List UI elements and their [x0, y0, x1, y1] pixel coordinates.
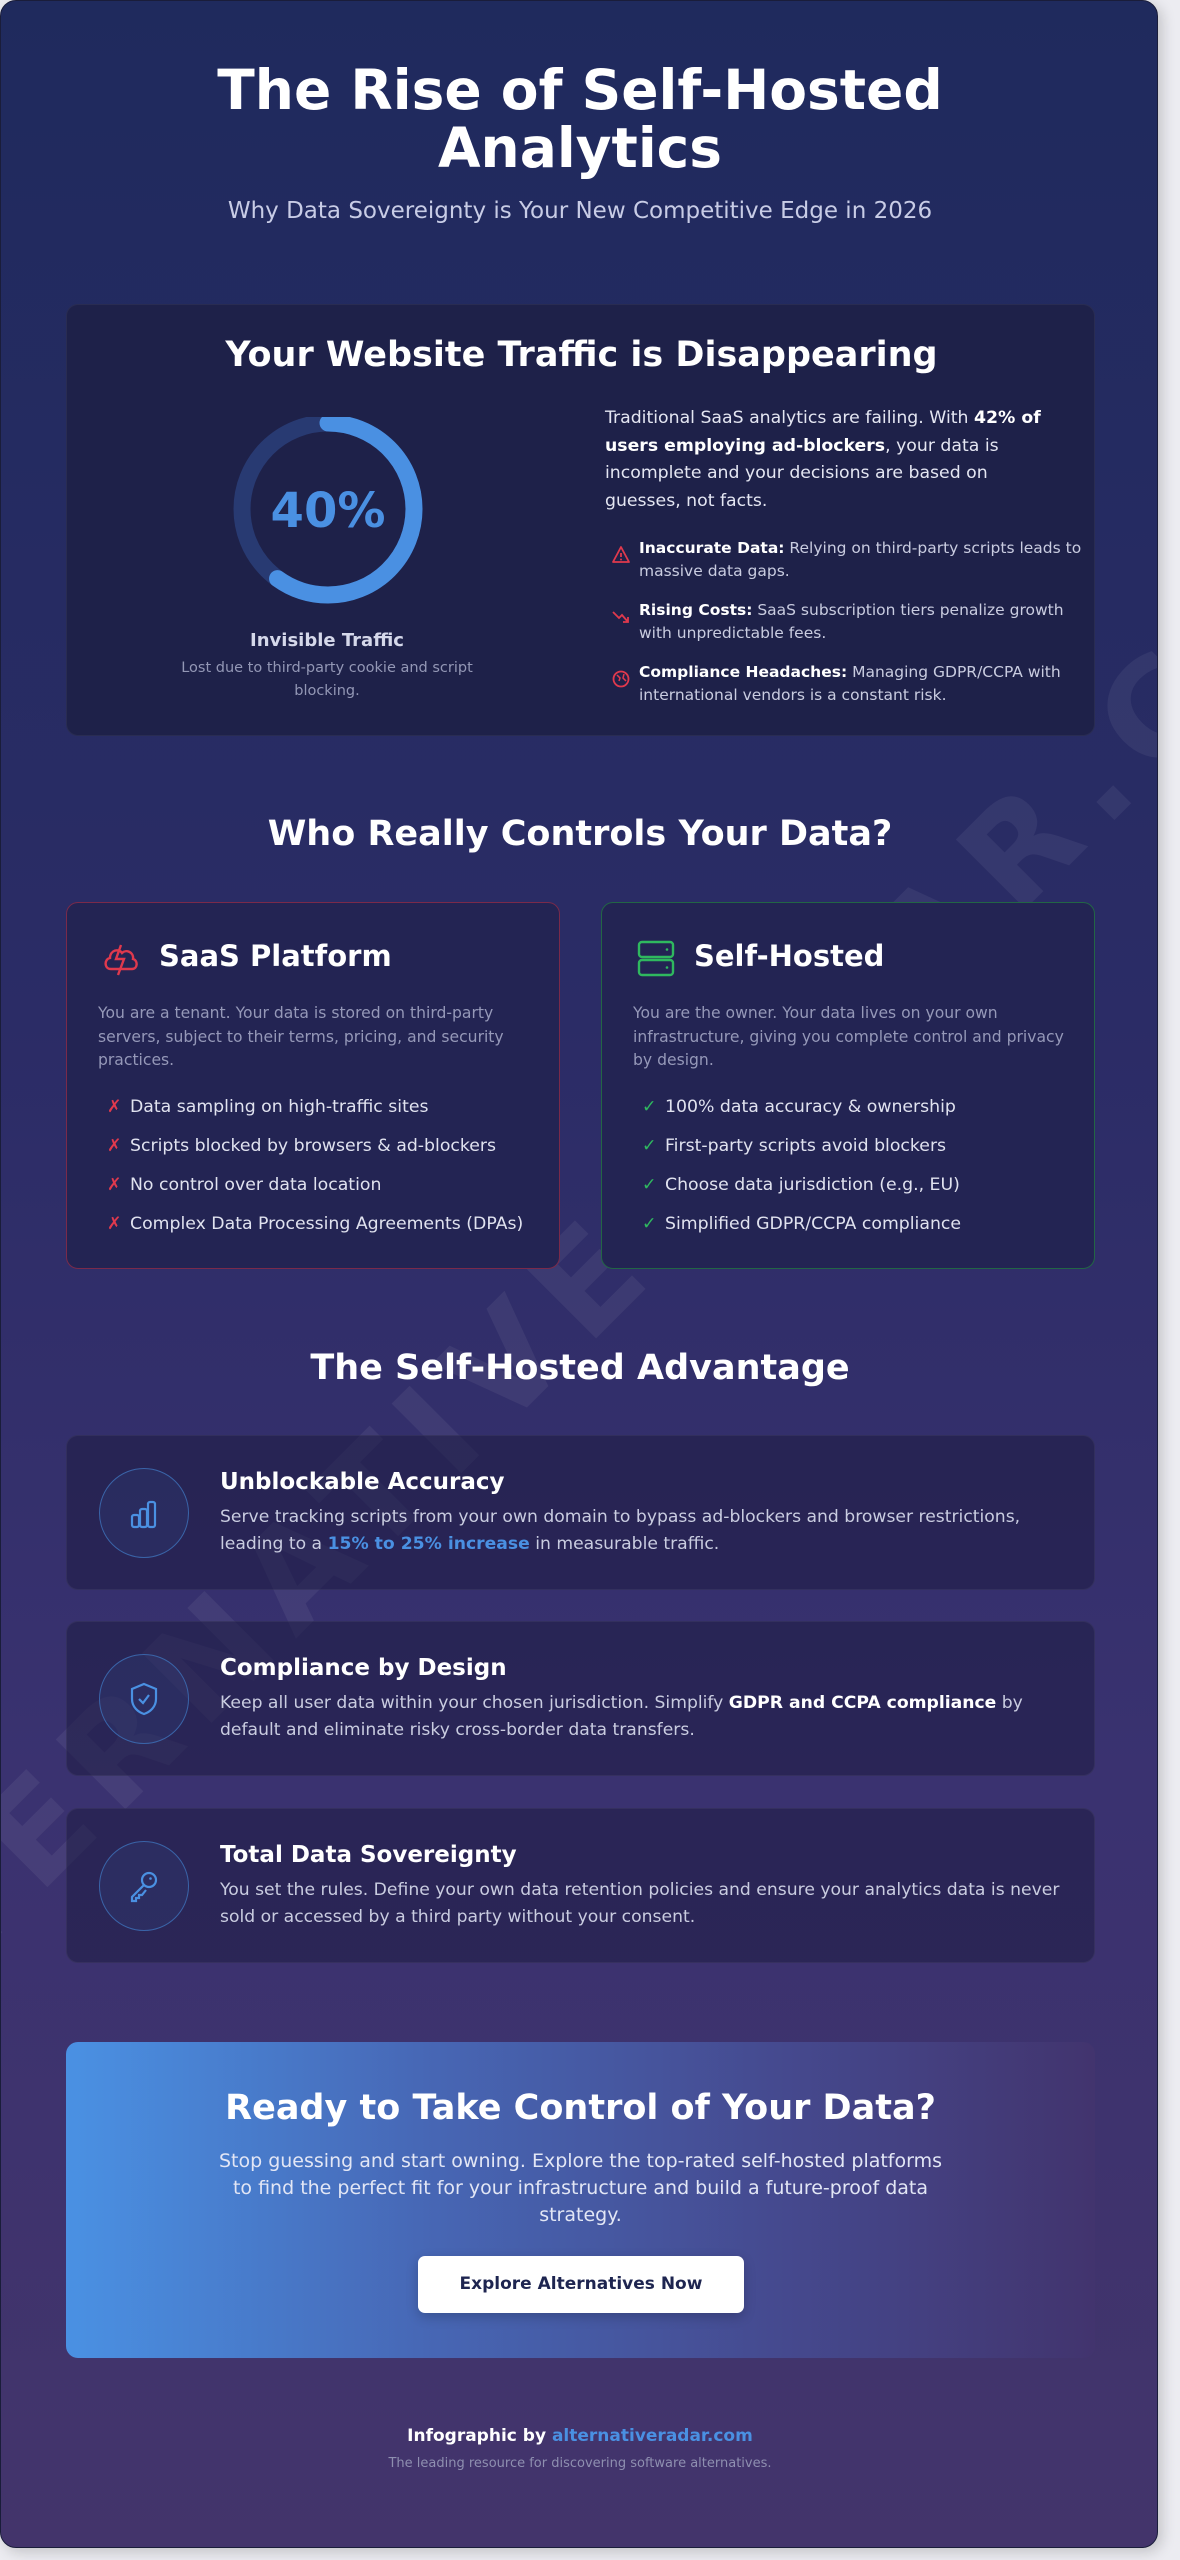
list: saas cons: Scripts blocked by browsers & ad-blockers: [130, 1136, 496, 1156]
list: self-hosted pros: ✓: [642, 1214, 656, 1234]
list: saas cons: No control over data location: [130, 1175, 381, 1195]
list: saas cons: ✗: [107, 1136, 121, 1156]
item: compliance headaches: Compliance Headaches: Managing GDPR/CCPA with international vendors is a constant risk.: [639, 663, 1061, 704]
icon: trend down: [612, 611, 629, 623]
label: invisible traffic: Invisible Traffic: [250, 630, 404, 651]
icon: broken cloud: [104, 944, 138, 976]
title: self-hosted: Self-Hosted: [694, 939, 884, 973]
footer: Infographic by alternativeradar.com: [407, 2426, 753, 2446]
list: saas cons: ✗: [107, 1175, 121, 1195]
title: Analytics: [438, 116, 722, 180]
icon: globe: [612, 670, 630, 688]
title: saas: SaaS Platform: [159, 939, 392, 973]
list: self-hosted pros: First-party scripts avoid blockers: [665, 1136, 946, 1156]
donut chart 40%: [234, 417, 422, 604]
title: compliance: Compliance by Design: [220, 1655, 507, 1681]
list: self-hosted pros: [642, 1097, 961, 1234]
list: self-hosted pros: ✓: [642, 1175, 656, 1195]
list: self-hosted pros: Choose data jurisdiction (e.g., EU): [665, 1175, 960, 1195]
icon: shield: [99, 1654, 189, 1744]
text: unblockable desc: Serve tracking scripts from your own domain to bypass ad-blockers and browser restrictions, leading to a 15% to 25% increase in measurable traffic.: [220, 1507, 1020, 1554]
title: [217, 58, 943, 180]
panel: saas platform: [66, 902, 560, 1269]
icon: key: [99, 1841, 189, 1931]
title: sovereignty: Total Data Sovereignty: [220, 1842, 517, 1868]
list: saas cons: ✗: [107, 1214, 121, 1234]
item: inaccurate data: Inaccurate Data: Relying on third-party scripts leads to massive data gaps.: [639, 539, 1081, 580]
card: unblockable accuracy: [66, 1435, 1095, 1590]
text: compliance desc: Keep all user data within your chosen jurisdiction. Simplify GDPR and CCPA compliance by default and eliminate risky cross-border data transfers.: [220, 1693, 1023, 1740]
donut chart 40%: 40%: [271, 483, 385, 539]
list: saas cons: Complex Data Processing Agreements (DPAs): [130, 1214, 523, 1234]
list: saas cons: ✗: [107, 1097, 121, 1117]
list: saas cons: [107, 1097, 523, 1234]
list: self-hosted pros: 100% data accuracy & ownership: [665, 1097, 956, 1117]
icon: server: [638, 940, 674, 976]
text: invisible traffic desc: Lost due to third-party cookie and script blocking.: [181, 660, 473, 699]
text: intro paragraph: Traditional SaaS analytics are failing. With 42% of users employing ad-blockers, your data is incomplete and your decisions are based on guesses, not facts.: [605, 408, 1041, 511]
text: cta desc: Stop guessing and start owning. Explore the top-rated self-hosted platforms to find the perfect fit for your infrastructure and build a future-proof data strategy.: [219, 2150, 942, 2226]
panel: traffic disappearing: [66, 304, 1095, 736]
subtitle: Why Data Sovereignty is Your New Competitive Edge in 2026: [228, 198, 932, 224]
text: sovereignty desc: You set the rules. Define your own data retention policies and ensure your analytics data is never sold or accessed by a third party without your consent.: [220, 1880, 1059, 1927]
list: saas cons: Data sampling on high-traffic sites: [130, 1097, 428, 1117]
card: compliance by design: [66, 1621, 1095, 1776]
footer: The leading resource for discovering software alternatives.: [388, 2456, 772, 2471]
heading: traffic: Your Website Traffic is Disappearing: [225, 335, 938, 375]
heading: who controls: Who Really Controls Your Data?: [268, 814, 892, 854]
heading: advantage: The Self-Hosted Advantage: [310, 1348, 850, 1388]
panel: call to action: [66, 2042, 1095, 2358]
card: total data sovereignty: [66, 1808, 1095, 1963]
title: unblockable: Unblockable Accuracy: [220, 1469, 505, 1495]
title: The Rise of Self-Hosted: [217, 58, 943, 122]
icon: warning: [612, 546, 630, 563]
panel: self-hosted: [601, 902, 1095, 1269]
button: explore: Explore Alternatives Now: [460, 2274, 702, 2294]
list: problems: [612, 539, 1081, 704]
text: saas desc: You are a tenant. Your data is stored on third-party servers, subject to their terms, pricing, and security practices.: [98, 1004, 504, 1069]
footer: [388, 2426, 772, 2471]
button: explore: [418, 2256, 744, 2313]
icon: bar chart: [99, 1468, 189, 1558]
text: self-hosted desc: You are the owner. Your data lives on your own infrastructure, giving you complete control and privacy by design.: [633, 1004, 1064, 1069]
list: self-hosted pros: ✓: [642, 1136, 656, 1156]
item: rising costs: Rising Costs: SaaS subscription tiers penalize growth with unpredictable fees.: [639, 601, 1064, 642]
heading: cta: Ready to Take Control of Your Data?: [225, 2088, 936, 2128]
list: self-hosted pros: ✓: [642, 1097, 656, 1117]
list: self-hosted pros: Simplified GDPR/CCPA compliance: [665, 1214, 961, 1234]
